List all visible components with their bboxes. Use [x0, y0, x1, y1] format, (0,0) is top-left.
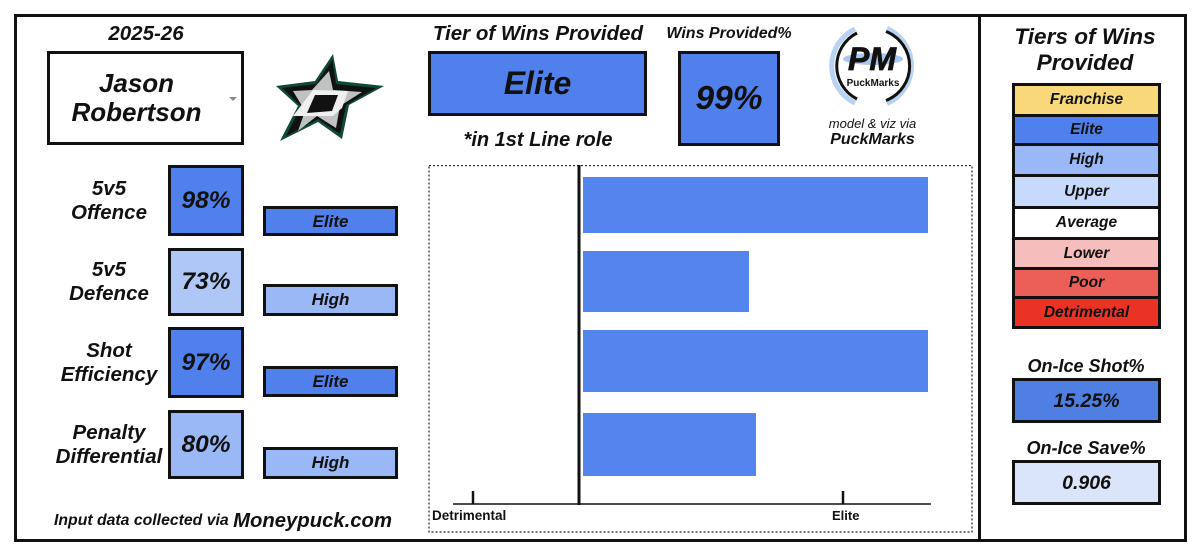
- tier: High: High: [1069, 151, 1104, 168]
- metric value: 80%: 80%: [181, 430, 231, 458]
- metric: 5v5 Offence: [71, 177, 147, 224]
- data source note: [54, 510, 392, 532]
- icon: PuckMarks logo: PuckMarks: [847, 78, 900, 89]
- bar: Penalty Differential: [583, 413, 756, 476]
- player name selector: Jason: [99, 68, 174, 98]
- heading: Tier of Wins Provided: Tier of Wins Provided: [433, 22, 643, 45]
- metric: Shot Efficiency: Efficiency: [61, 363, 157, 386]
- metric: Shot Efficiency: Shot: [86, 339, 132, 362]
- tier: Upper: Upper: [1064, 182, 1109, 200]
- metric value: 73%: [168, 248, 244, 316]
- tier: Detrimental: [1012, 296, 1161, 329]
- logo credit: PuckMarks: [830, 131, 915, 148]
- bar: 5v5 Defence: [583, 251, 749, 312]
- metric: 5v5 Offence: Offence: [71, 201, 147, 224]
- data source note: Moneypuck.com: [233, 510, 392, 532]
- legend heading: [1014, 24, 1156, 75]
- metric: Shot Efficiency: [61, 339, 158, 386]
- tier: Franchise: Franchise: [1050, 91, 1123, 108]
- player name selector: [47, 51, 244, 145]
- tier bar: Elite: [263, 206, 398, 236]
- metric value: 97%: 97%: [181, 348, 231, 376]
- tier bar: Elite: [263, 366, 398, 397]
- metric: 5v5 Offence: 5v5: [92, 177, 126, 200]
- on-ice shot value: [1012, 378, 1161, 423]
- logo credit: [829, 116, 916, 148]
- data source note: Input data collected via: [54, 512, 229, 529]
- on-ice save value: [1012, 460, 1161, 505]
- legend heading: Provided: [1037, 50, 1133, 75]
- zero line: [578, 165, 580, 505]
- tier: Detrimental: Detrimental: [1044, 304, 1129, 320]
- metric: Penalty Differential: [56, 421, 163, 468]
- tier: Average: [1012, 206, 1161, 240]
- axis label: Elite: Elite: [832, 508, 859, 523]
- logo credit: model & viz via: [829, 116, 916, 131]
- icon: PuckMarks logo: [829, 26, 914, 106]
- heading: On-Ice Shot%: On-Ice Shot%: [1027, 356, 1144, 376]
- tier bar: High: [263, 284, 398, 316]
- tier bar: High: [263, 447, 398, 479]
- legend: tiers: [1012, 83, 1161, 329]
- tier: Lower: Lower: [1064, 244, 1109, 262]
- on-ice shot value: 15.25%: [1053, 390, 1120, 412]
- role note: *in 1st Line role: [464, 128, 612, 150]
- metric value: 98%: 98%: [181, 186, 231, 214]
- tier bar: High: High: [312, 290, 349, 309]
- tier: Poor: Poor: [1069, 274, 1104, 291]
- metric: 5v5 Defence: Defence: [69, 282, 149, 305]
- bar: Shot Efficiency: [583, 330, 928, 392]
- on-ice save value: 0.906: [1062, 472, 1111, 494]
- heading: Wins Provided%: Wins Provided%: [666, 25, 792, 42]
- tier bar: High: High: [312, 453, 349, 472]
- metric: 5v5 Defence: 5v5: [92, 258, 126, 281]
- season heading: 2025-26: [108, 22, 184, 45]
- metric: Penalty Differential: Penalty: [73, 421, 145, 444]
- metric value: 97%: [168, 327, 244, 398]
- tier: Franchise: [1012, 83, 1161, 117]
- heading: On-Ice Save%: On-Ice Save%: [1026, 438, 1146, 458]
- icon: Dallas Stars logo: [276, 54, 384, 141]
- metric value: 80%: [168, 410, 244, 479]
- metric value: 73%: 73%: [181, 268, 231, 295]
- tier bar: Elite: Elite: [313, 212, 348, 230]
- x axis: [453, 491, 931, 504]
- tier: Average: Average: [1056, 214, 1117, 231]
- legend heading: Tiers of Wins: [1014, 24, 1156, 48]
- tier: Elite: Elite: [1070, 121, 1103, 138]
- tier: Poor: [1012, 267, 1161, 299]
- axis label: Detrimental: Detrimental: [432, 508, 506, 523]
- player name selector: Robertson: [72, 97, 202, 127]
- tier: High: [1012, 143, 1161, 177]
- panel: bar chart: [428, 165, 973, 533]
- overall tier box: [428, 51, 647, 116]
- tier bar: Elite: Elite: [313, 372, 348, 390]
- wins provided value: [678, 51, 780, 146]
- tier: Lower: [1012, 237, 1161, 270]
- wins provided value: 99%: [695, 80, 763, 116]
- bar: 5v5 Offence: [583, 177, 928, 233]
- tier: Elite: [1012, 114, 1161, 146]
- overall tier box: Elite: [504, 65, 571, 101]
- metric: 5v5 Defence: [69, 258, 149, 305]
- icon: PuckMarks logo: PM: [848, 41, 897, 77]
- tier: Upper: [1012, 174, 1161, 209]
- metric: Penalty Differential: Differential: [56, 445, 162, 468]
- column divider: [978, 14, 981, 542]
- metric value: 98%: [168, 165, 244, 236]
